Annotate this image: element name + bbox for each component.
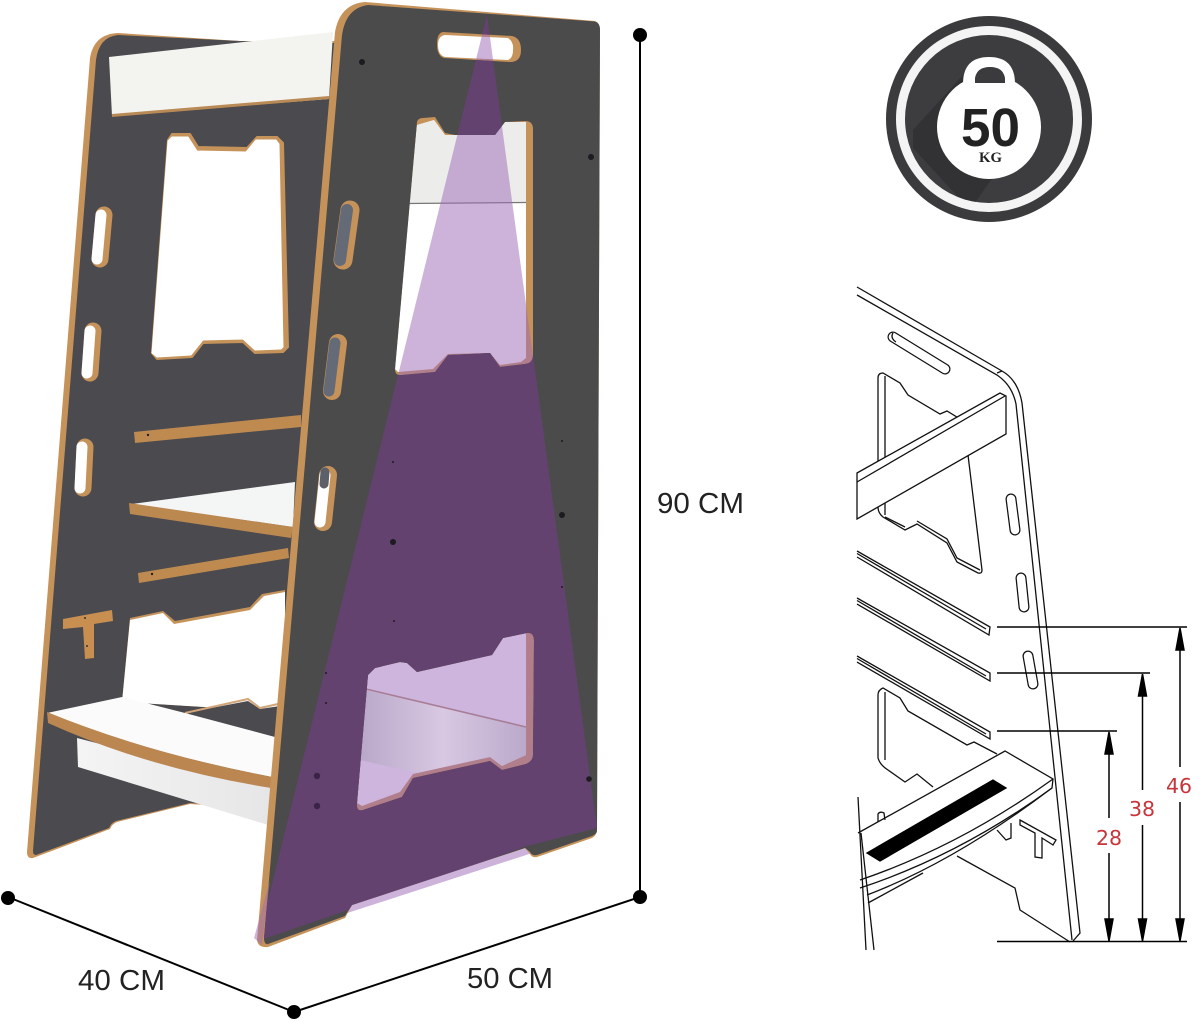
- back panel lower window: [122, 590, 285, 738]
- drawing: T joint: [1020, 820, 1056, 858]
- window interior: upper: [394, 120, 526, 372]
- drawing: rails: [857, 551, 990, 739]
- drawing: side slots: [1011, 499, 1033, 684]
- back panel upper window: [152, 134, 288, 359]
- drawing: lower window: [878, 688, 997, 787]
- label: height: 90 CM: [657, 488, 744, 520]
- label: width: 50 CM: [467, 963, 553, 995]
- badge long shadow: [913, 75, 993, 210]
- handle interior: [438, 35, 513, 60]
- drawing: lower panel edge and feet: [858, 797, 1070, 950]
- purple highlight on front panel: [258, 15, 597, 941]
- drawing: top slot: [892, 333, 945, 369]
- kettlebell icon: [937, 57, 1041, 179]
- badge: 50 KG weight limit: [886, 16, 1092, 222]
- T-shaped joint: [63, 610, 113, 659]
- drawing: top board: [857, 393, 1006, 519]
- top white board: [109, 32, 333, 117]
- lower rail: [138, 548, 289, 583]
- arrow: 46: [1176, 628, 1184, 941]
- back panel slots: [80, 215, 104, 488]
- bottom step apron: [77, 738, 272, 825]
- step height: 28: 28: [1096, 826, 1122, 850]
- middle step: [129, 482, 295, 538]
- arrow: 28: [1105, 732, 1113, 941]
- translucent purple triangle over openings: [258, 15, 597, 942]
- purple tint on panel edge: [254, 880, 270, 945]
- window interior: lower: [357, 633, 526, 806]
- dimension lines: [1, 28, 647, 1019]
- kettlebell icon: 50: [961, 98, 1020, 158]
- drawing: height guides: [997, 627, 1187, 942]
- drawing: upper window: [878, 373, 982, 573]
- screws and dots: [314, 59, 594, 809]
- label: depth: 40 CM: [78, 965, 165, 997]
- technical drawing: [857, 287, 1187, 950]
- arrow: 38: [1138, 674, 1146, 941]
- drawing: panel outline: [857, 287, 1080, 941]
- back side panel: [27, 33, 335, 858]
- front side panel: [257, 2, 600, 947]
- kettlebell icon: KG: [979, 150, 1002, 166]
- product photo: tower stool: [27, 2, 600, 947]
- upper rail: [134, 415, 301, 443]
- drawing: bottom step: [858, 751, 1053, 903]
- step height: 38: 38: [1129, 797, 1155, 821]
- front panel slots: [320, 210, 350, 522]
- step height: 46: 46: [1166, 774, 1192, 798]
- behind-window orange faces: [350, 28, 540, 818]
- bottom step: [47, 697, 275, 788]
